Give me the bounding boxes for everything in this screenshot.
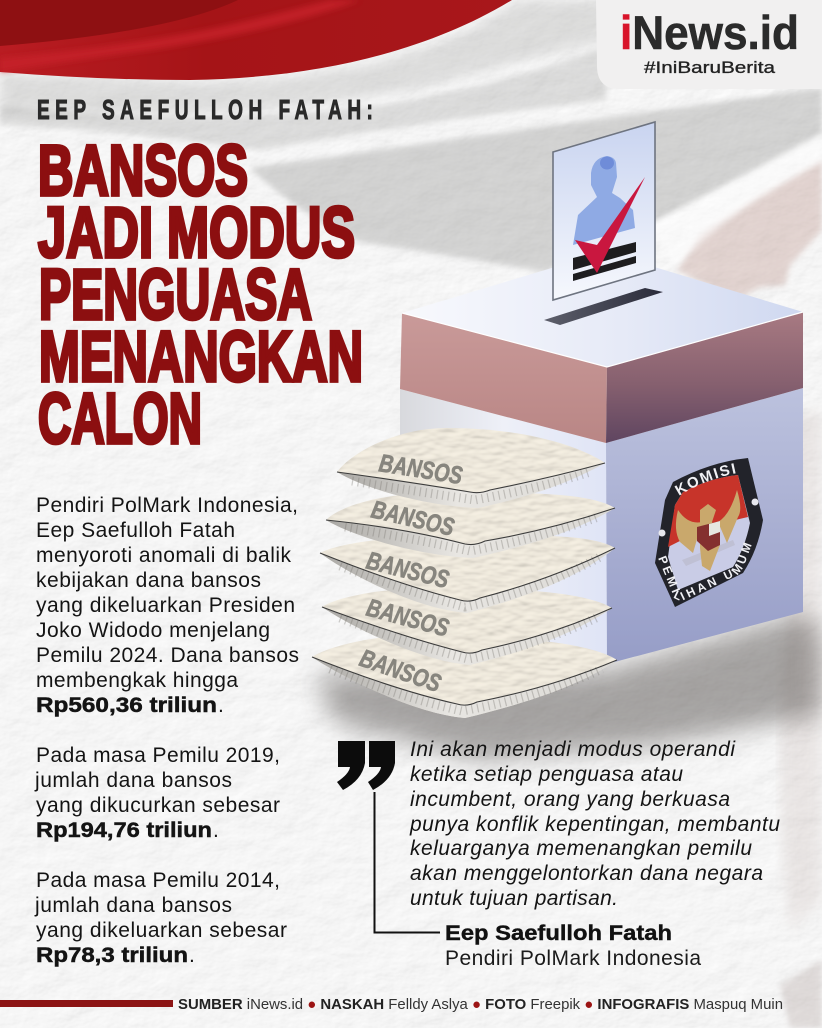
paragraph: Pemilu 2024: kebijakan dana bansos <box>36 569 261 592</box>
box red band left <box>400 313 607 443</box>
sack 1: BANSOS <box>377 449 465 490</box>
sack 3: BANSOS <box>364 547 452 594</box>
paragraph: Pemilu 2019: yang dikucurkan sebesar <box>36 794 280 817</box>
paragraph: Pemilu 2024: Joko Widodo menjelang <box>36 619 270 642</box>
quote connector line <box>374 792 440 932</box>
paragraph: Pemilu 2024: Rp560,36 triliun <box>36 693 217 717</box>
quote text: Ini akan menjadi modus operandi <box>410 738 736 761</box>
quote text: keluarganya memenangkan pemilu <box>410 837 752 860</box>
footer credits: SUMBER iNews.id ● NASKAH Felldy Aslya ● FOTO Freepik ● INFOGRAFIS Maspuq Muin <box>178 996 783 1013</box>
paragraph: Pemilu 2024: membengkak hingga <box>36 669 238 692</box>
quote text: punya konflik kepentingan, membantu <box>409 813 780 836</box>
paragraph: Pemilu 2014: Rp78,3 triliun <box>36 943 188 967</box>
main headline <box>38 132 363 459</box>
box right face <box>606 388 803 664</box>
quote text: untuk tujuan partisan. <box>410 887 618 910</box>
quote text <box>409 738 780 910</box>
quote text: incumbent, orang yang berkuasa <box>410 788 730 811</box>
text bars <box>573 242 636 270</box>
ballot paper <box>553 122 655 300</box>
main headline: PENGUASA <box>39 256 312 335</box>
box top face <box>402 252 803 367</box>
box ground shadow <box>315 612 822 760</box>
kicker heading: EEP SAEFULLOH FATAH: <box>37 94 373 126</box>
paragraph: Pemilu 2024: Pendiri PolMark Indonesia, <box>36 494 298 517</box>
logo tagline: #IniBaruBerita <box>644 58 776 77</box>
box left face <box>400 389 607 663</box>
main headline: CALON <box>38 380 202 459</box>
main headline: MENANGKAN <box>39 318 363 397</box>
ballot slot <box>544 288 663 325</box>
red flag at top <box>0 0 512 80</box>
sack 2: BANSOS <box>369 496 457 542</box>
icon: quotation mark <box>337 741 395 790</box>
KPU emblem <box>655 458 763 607</box>
quote attribution <box>445 921 701 970</box>
paragraph: Pemilu 2019: Pada masa Pemilu 2019, <box>36 744 280 767</box>
paragraph: Pemilu 2024: . <box>218 694 224 717</box>
paragraph: Pemilu 2014: yang dikeluarkan sebesar <box>36 919 287 942</box>
rice sacks stack <box>312 428 617 718</box>
paragraph: Pemilu 2014 <box>34 869 287 967</box>
check mark <box>575 177 645 273</box>
quote attribution: Eep Saefulloh Fatah <box>445 921 672 945</box>
quote text: ketika setiap penguasa atau <box>410 763 683 786</box>
sack 4 <box>322 588 612 665</box>
paragraph: Pemilu 2024 <box>36 494 299 717</box>
paragraph: Pemilu 2024: yang dikeluarkan Presiden <box>36 594 295 617</box>
main headline: JADI MODUS <box>38 194 355 273</box>
KPU emblem: PEMILIHAN UMUM <box>658 542 752 600</box>
emblem lettering: KOMISI <box>674 463 736 496</box>
sack 3 <box>320 536 615 613</box>
garuda <box>676 490 740 571</box>
ballot box <box>315 252 822 760</box>
quote attribution: Pendiri PolMark Indonesia <box>445 947 701 970</box>
quote text: akan menggelontorkan dana negara <box>410 862 763 885</box>
main headline: BANSOS <box>38 132 248 211</box>
paragraph: Pemilu 2019 <box>34 744 280 842</box>
sack 5 <box>312 635 617 718</box>
paragraph: Pemilu 2019: jumlah dana bansos <box>34 769 232 792</box>
paragraph: Pemilu 2019: Rp194,76 triliun <box>36 818 212 842</box>
sack 1 <box>337 428 605 508</box>
sack 2 <box>326 493 615 558</box>
box red band right <box>606 312 803 443</box>
paragraph: Pemilu 2019: . <box>213 819 219 842</box>
logo panel: iNews.id <box>596 0 822 89</box>
paragraph: Pemilu 2014: Pada masa Pemilu 2014, <box>36 869 280 892</box>
paragraph: Pemilu 2014: jumlah dana bansos <box>34 894 232 917</box>
paragraph: Pemilu 2024: Pemilu 2024. Dana bansos <box>36 644 299 667</box>
sack 5: BANSOS <box>356 644 445 698</box>
logo wordmark: iNews.id <box>620 6 799 59</box>
footer rule <box>0 1000 173 1007</box>
sack 4: BANSOS <box>363 594 452 643</box>
candidate silhouette <box>573 156 635 245</box>
paragraph: Pemilu 2014: . <box>189 944 195 967</box>
paragraph: Pemilu 2024: Eep Saefulloh Fatah <box>36 519 235 542</box>
paragraph: Pemilu 2024: menyoroti anomali di balik <box>36 544 292 567</box>
